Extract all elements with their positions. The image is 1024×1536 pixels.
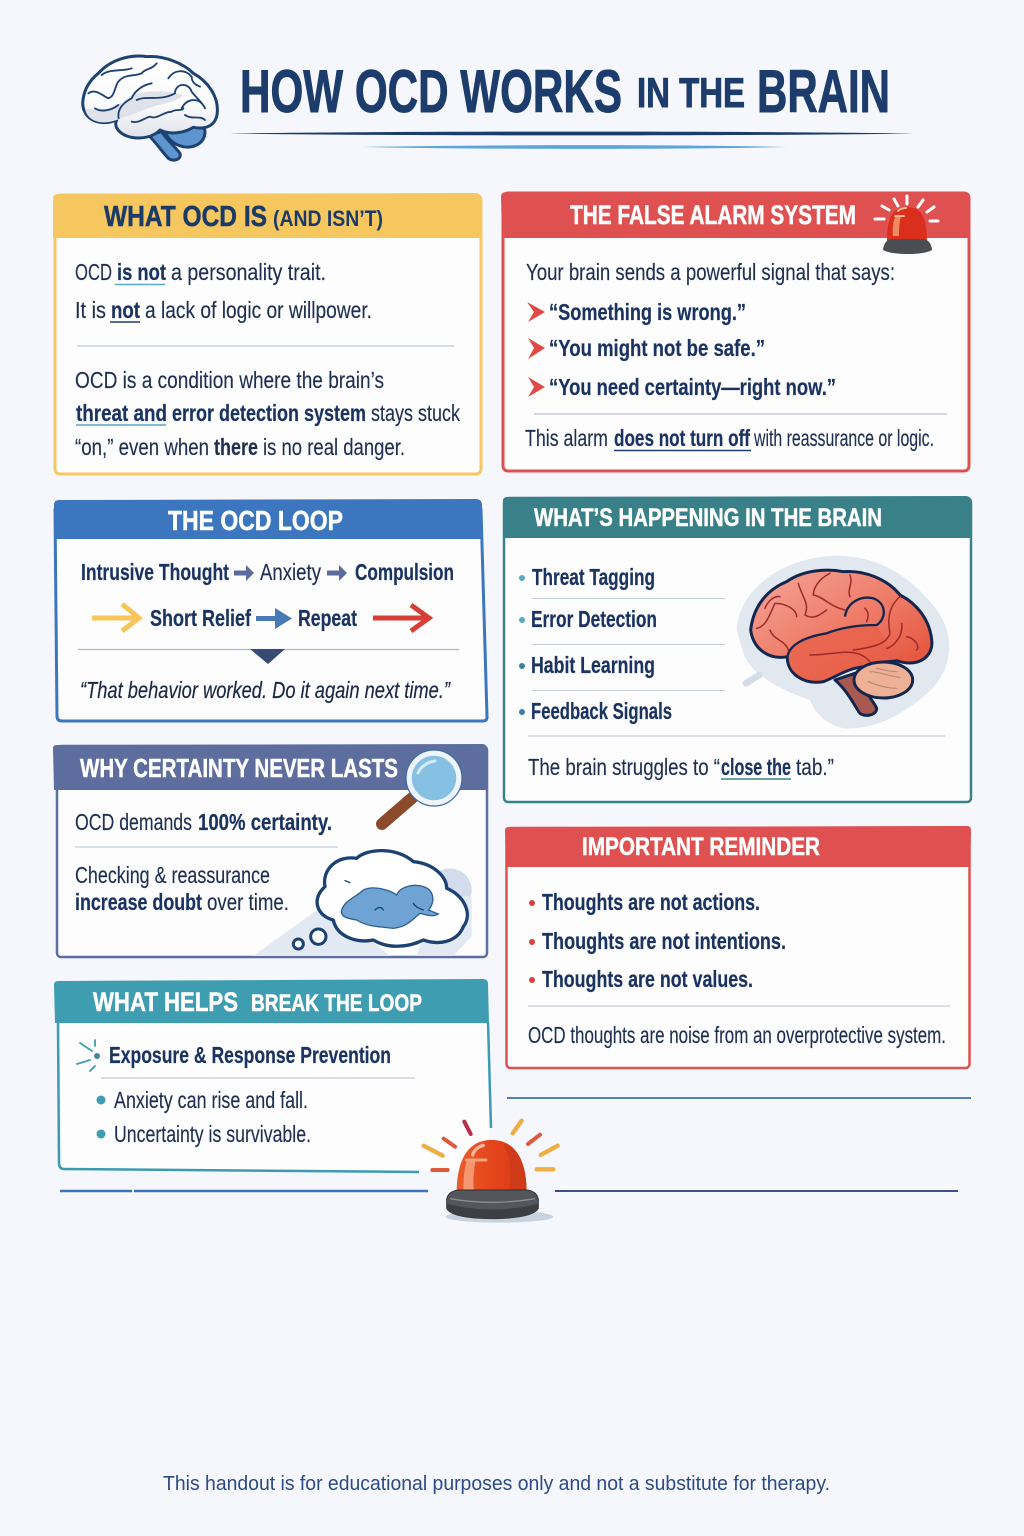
list: reminders: Thoughts are not values. xyxy=(542,966,753,992)
text: close the tab: The brain struggles to “ xyxy=(528,754,720,780)
panel heading xyxy=(104,201,383,233)
list: brain processes xyxy=(519,564,725,724)
flow row 2 xyxy=(92,604,429,631)
panel heading: (AND ISN’T) xyxy=(273,206,383,231)
text: what it is not xyxy=(75,259,372,323)
list: brain processes: Feedback Signals xyxy=(531,698,672,724)
panel: what OCD is xyxy=(53,193,481,474)
panel: the false alarm system xyxy=(501,192,970,471)
text: alarm conclusion xyxy=(525,425,934,451)
title header xyxy=(83,56,913,160)
heading text: HOW OCD WORKS xyxy=(240,58,622,125)
text: alarm conclusion: This alarm xyxy=(525,425,608,451)
list: reminders: Thoughts are not actions. xyxy=(542,889,760,915)
list: helps: Uncertainty is survivable. xyxy=(114,1121,311,1147)
panel heading: IMPORTANT REMINDER xyxy=(582,833,820,861)
text: demands certainty: 100% certainty. xyxy=(198,809,332,835)
flow row 1: Intrusive Thought xyxy=(81,559,229,585)
list: helps xyxy=(96,1087,311,1147)
list: alarm messages xyxy=(527,299,836,400)
text: alarm conclusion: with reassurance or logic. xyxy=(753,425,934,451)
icon: magnifying glass xyxy=(382,750,462,824)
text: checking: over time. xyxy=(207,889,289,915)
text: what it is not: is not xyxy=(117,259,166,285)
panel heading: WHY CERTAINTY NEVER LASTS xyxy=(80,753,398,783)
heading text: BRAIN xyxy=(757,58,890,125)
text: what it is: threat and xyxy=(76,400,167,426)
list: reminders xyxy=(529,889,786,992)
panel heading: THE FALSE ALARM SYSTEM xyxy=(570,200,856,230)
icon: down triangle xyxy=(250,649,285,664)
text: what it is: “on,” even when xyxy=(75,434,209,460)
panel heading: BREAK THE LOOP xyxy=(251,990,422,1017)
text: demands certainty xyxy=(75,809,332,835)
text: what it is not: a lack of logic or willpower. xyxy=(145,297,372,323)
heading text: IN THE xyxy=(637,69,745,116)
footer note: This handout is for educational purposes only and not a substitute for therapy. xyxy=(163,1473,830,1495)
panel: what's happening in the brain xyxy=(503,496,971,802)
icon: small siren xyxy=(875,196,938,254)
text: what it is: error detection system xyxy=(172,400,366,426)
flow row 2: Short Relief xyxy=(150,605,251,631)
flow row 1 xyxy=(81,559,454,585)
panel heading: THE OCD LOOP xyxy=(168,505,343,536)
text: close the tab: close the xyxy=(721,754,791,780)
text: alarm conclusion: does not turn off xyxy=(614,425,750,451)
text: what it is xyxy=(75,367,460,460)
panel heading xyxy=(93,987,422,1017)
list: brain processes: Error Detection xyxy=(531,606,657,632)
list: brain processes: Habit Learning xyxy=(531,652,655,678)
quote: “That behavior worked. Do it again next time.” xyxy=(80,677,451,703)
text: what it is not: a personality trait. xyxy=(171,259,326,285)
panel heading: WHAT’S HAPPENING IN THE BRAIN xyxy=(534,504,882,532)
icon: thought cloud xyxy=(253,851,472,956)
list: helps: Anxiety can rise and fall. xyxy=(114,1087,308,1113)
text: what it is: OCD is a condition where the brain’s xyxy=(75,367,384,393)
list: alarm messages: “You need certainty—right now.” xyxy=(549,374,836,400)
text: what it is: stays stuck xyxy=(371,400,460,426)
flow row 2: Repeat xyxy=(298,605,357,631)
icon: large siren xyxy=(424,1121,558,1223)
text: close the tab: tab.” xyxy=(796,754,834,780)
icon: red brain xyxy=(737,556,949,728)
subheading: Exposure & Response Prevention xyxy=(109,1042,391,1068)
text: what it is: is no real danger. xyxy=(263,434,405,460)
icon: burst xyxy=(77,1040,100,1071)
panel: important reminder xyxy=(505,826,971,1068)
text: what it is not: OCD xyxy=(75,259,112,285)
text: checking: Checking & reassurance xyxy=(75,862,270,888)
panel heading: WHAT OCD IS xyxy=(104,201,267,233)
text: what it is: there xyxy=(214,434,258,460)
list: alarm messages: “Something is wrong.” xyxy=(549,299,746,325)
panel: what helps break the loop xyxy=(54,979,491,1172)
text: intro: Your brain sends a powerful signal that says: xyxy=(526,259,895,285)
flow row 1: Compulsion xyxy=(355,559,454,585)
text: demands certainty: OCD demands xyxy=(75,809,192,835)
list: alarm messages: “You might not be safe.” xyxy=(549,335,765,361)
list: reminders: Thoughts are not intentions. xyxy=(542,928,786,954)
flow row 1: Anxiety xyxy=(260,559,321,585)
panel heading: WHAT HELPS xyxy=(93,987,238,1017)
text: what it is not: not xyxy=(111,297,140,323)
panel: the OCD loop xyxy=(54,499,487,721)
icon: blue outline brain xyxy=(83,56,217,160)
panel: why certainty never lasts xyxy=(53,744,487,957)
list: brain processes: Threat Tagging xyxy=(532,564,655,590)
text: what it is not: It is xyxy=(75,297,106,323)
text: checking: increase doubt xyxy=(75,889,202,915)
text: checking xyxy=(75,862,289,915)
